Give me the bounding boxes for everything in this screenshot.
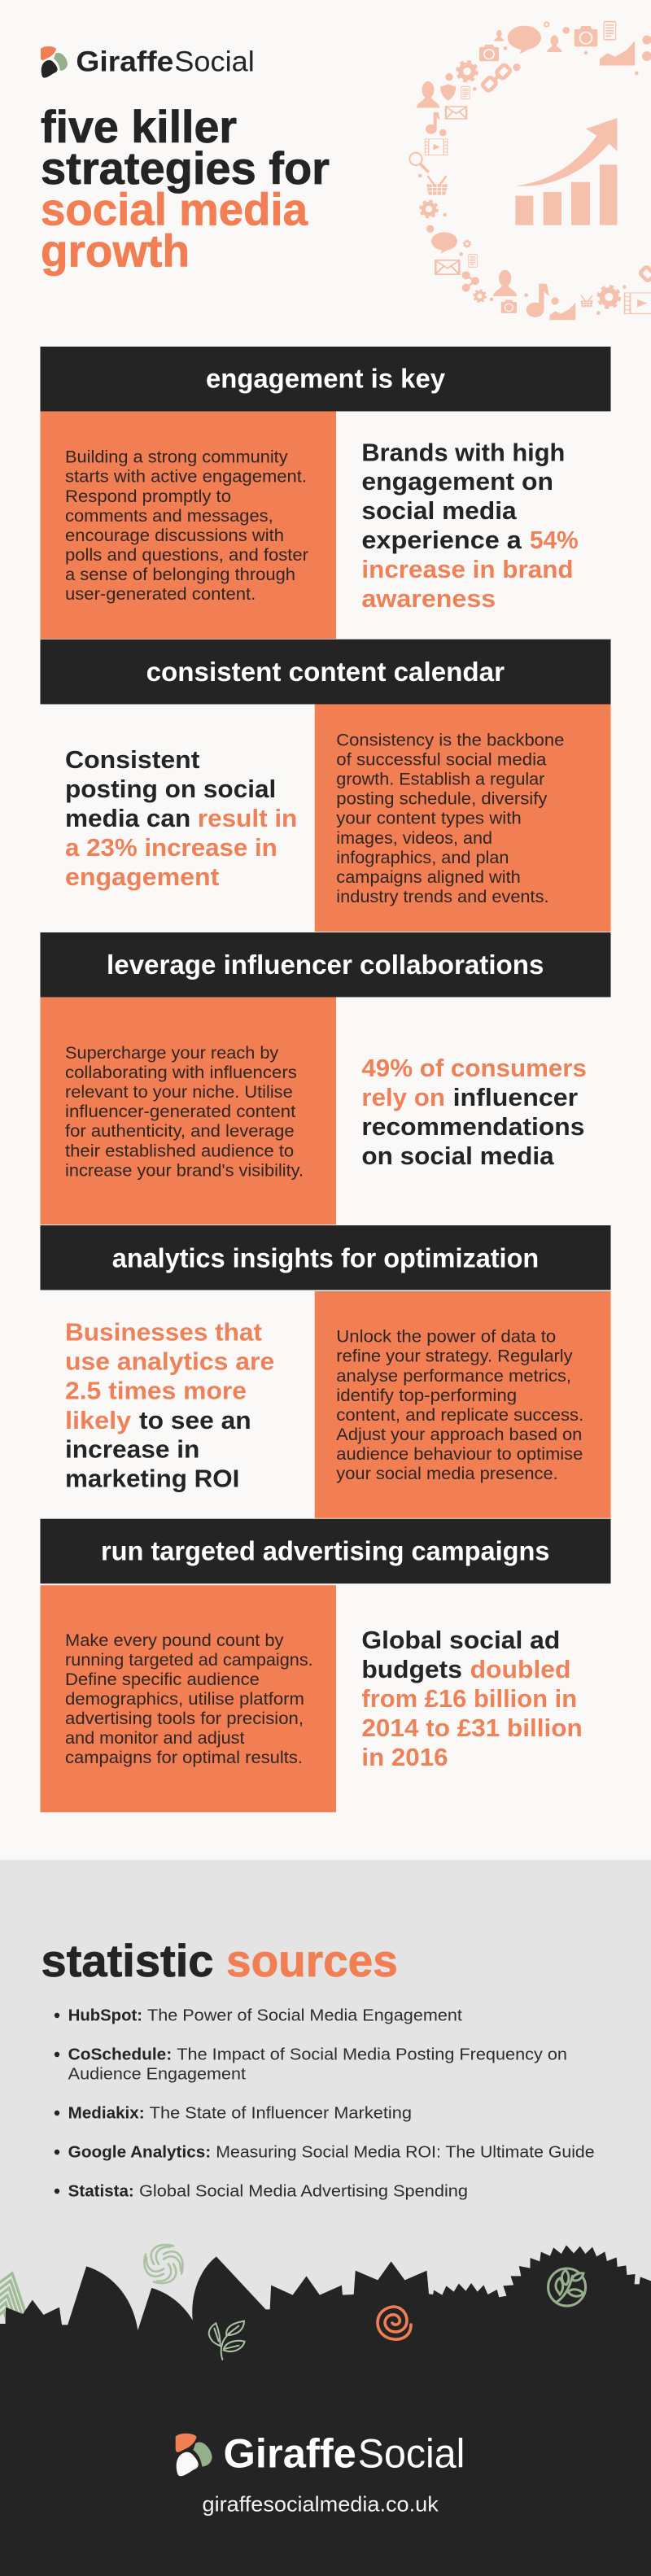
- text block: influencer-generated content: [65, 1102, 295, 1121]
- statistic callout: recommendations: [361, 1112, 584, 1141]
- title: social media: [41, 184, 308, 235]
- statistic callout: budgets: [361, 1655, 462, 1683]
- source list: The Power of Social Media Engagement: [147, 2006, 462, 2024]
- panel: run targeted advertising campaigns: [41, 1519, 610, 1812]
- statistic callout: [361, 1054, 587, 1170]
- logo wordmark: Giraffe: [76, 46, 173, 78]
- text block: your social media presence.: [336, 1465, 558, 1483]
- panel: engagement is key: [41, 347, 610, 639]
- statistic callout: engagement on: [361, 467, 553, 496]
- heading: engagement is key: [206, 364, 446, 394]
- bar chart: [515, 164, 617, 225]
- statistic callout: to see an: [139, 1406, 251, 1434]
- text block: Define specific audience: [65, 1670, 260, 1689]
- text block: content, and replicate success.: [336, 1406, 583, 1425]
- text block: demographics, utilise platform: [65, 1690, 304, 1709]
- title: strategies for: [41, 142, 330, 194]
- panel: statistic sources: [0, 1860, 651, 2381]
- text block: Adjust your approach based on: [336, 1426, 582, 1444]
- text block: Consistency is the backbone: [336, 731, 564, 750]
- statistic callout: 2014 to £31 billion: [361, 1714, 583, 1742]
- text block: images, videos, and: [336, 829, 492, 848]
- text block: encourage discussions with: [65, 526, 284, 545]
- text block: [315, 705, 610, 932]
- statistic callout: in 2016: [361, 1743, 448, 1771]
- heading: [41, 1935, 398, 1986]
- text block: Building a strong community: [65, 448, 288, 467]
- statistic callout: [65, 1317, 274, 1493]
- text block: audience behaviour to optimise: [336, 1445, 583, 1464]
- statistic callout: [65, 745, 297, 891]
- statistic callout: on social media: [361, 1142, 554, 1170]
- icon: green swirl: [144, 2245, 183, 2283]
- statistic callout: [361, 1626, 583, 1771]
- text block: polls and questions, and foster: [65, 546, 308, 565]
- source list: The Impact of Social Media Posting Frequency on: [177, 2046, 567, 2064]
- statistic callout: likely: [65, 1406, 132, 1434]
- statistic callout: 54%: [530, 526, 579, 554]
- icon: rising arrow: [516, 118, 617, 186]
- statistic callout: posting on social: [65, 775, 276, 803]
- statistic callout: awareness: [361, 584, 496, 613]
- statistic callout: a 23% increase in: [65, 833, 277, 862]
- illustration: growth chart inside a ring of social icons: [409, 22, 651, 320]
- text block: industry trends and events.: [336, 888, 548, 906]
- title: [41, 101, 330, 277]
- icon: green chevron tree: [0, 2273, 27, 2324]
- text block: comments and messages,: [65, 507, 273, 526]
- source list: HubSpot:: [68, 2006, 142, 2024]
- heading: statistic: [41, 1935, 213, 1986]
- text block: campaigns for optimal results.: [65, 1749, 303, 1767]
- statistic callout: marketing ROI: [65, 1465, 239, 1493]
- icon: footer logo mark: [176, 2434, 212, 2476]
- text block: [41, 1585, 336, 1812]
- statistic callout: social media: [361, 496, 517, 525]
- panel: leverage influencer collaborations: [41, 932, 610, 1225]
- heading: leverage influencer collaborations: [107, 950, 544, 980]
- title: five killer: [41, 101, 237, 152]
- website url: giraffesocialmedia.co.uk: [202, 2492, 439, 2517]
- icon: round leaf badge: [548, 2268, 586, 2306]
- source list: Statista:: [68, 2182, 134, 2201]
- source list: Audience Engagement: [68, 2065, 246, 2084]
- source list: [55, 2006, 595, 2201]
- heading: [41, 640, 610, 705]
- heading: [41, 1225, 610, 1290]
- heading: analytics insights for optimization: [112, 1243, 539, 1273]
- text block: Supercharge your reach by: [65, 1044, 279, 1063]
- text block: starts with active engagement.: [65, 468, 307, 487]
- statistic callout: engagement: [65, 862, 219, 891]
- heading: [41, 1519, 610, 1583]
- statistic callout: Consistent: [65, 745, 199, 774]
- statistic callout: increase in brand: [361, 555, 574, 583]
- text block: a sense of belonging through: [65, 565, 295, 584]
- text block: advertising tools for precision,: [65, 1709, 304, 1728]
- heading: [41, 347, 610, 412]
- icon: logo mark: [41, 46, 68, 78]
- statistic callout: result in: [198, 804, 297, 832]
- text block: Make every pound count by: [65, 1631, 284, 1650]
- text block: [41, 412, 336, 639]
- text block: refine your strategy. Regularly: [336, 1347, 573, 1366]
- text block: growth. Establish a regular: [336, 771, 544, 789]
- text block: for authenticity, and leverage: [65, 1122, 295, 1141]
- text block: your content types with: [336, 810, 522, 828]
- panel: analytics insights for optimization: [41, 1225, 610, 1518]
- heading: sources: [226, 1935, 398, 1986]
- logo wordmark: [76, 46, 255, 78]
- source list: Global Social Media Advertising Spending: [139, 2182, 468, 2201]
- footer: dark torn-edge panel: [0, 2245, 651, 2576]
- statistic callout: increase in: [65, 1435, 199, 1464]
- text block: campaigns aligned with: [336, 868, 521, 887]
- statistic callout: Businesses that: [65, 1317, 262, 1346]
- text block: collaborating with influencers: [65, 1063, 297, 1082]
- heading: run targeted advertising campaigns: [101, 1535, 550, 1565]
- source list: The State of Influencer Marketing: [150, 2103, 412, 2122]
- footer wordmark: Giraffe: [223, 2430, 356, 2476]
- statistic callout: Brands with high: [361, 438, 565, 466]
- text block: their established audience to: [65, 1142, 294, 1160]
- text block: identify top-performing: [336, 1386, 517, 1405]
- icon: leaf sprig: [209, 2321, 245, 2360]
- footer wordmark: Social: [358, 2430, 465, 2476]
- text block: Respond promptly to: [65, 487, 231, 506]
- text block: relevant to your niche. Utilise: [65, 1083, 293, 1102]
- source list: Google Analytics:: [68, 2143, 211, 2162]
- heading: consistent content calendar: [146, 657, 505, 687]
- statistic callout: Global social ad: [361, 1626, 560, 1654]
- footer wordmark: [223, 2430, 465, 2476]
- statistic callout: experience a: [361, 526, 522, 554]
- logo: footer brand: [176, 2430, 465, 2517]
- logo: GiraffeSocial header: [41, 46, 255, 78]
- statistic callout: from £16 billion in: [361, 1684, 577, 1713]
- statistic callout: doubled: [470, 1655, 571, 1683]
- text block: analyse performance metrics,: [336, 1367, 571, 1386]
- statistic callout: media can: [65, 804, 190, 832]
- statistic callout: use analytics are: [65, 1347, 274, 1376]
- icon: orange spiral: [378, 2307, 411, 2339]
- text block: [315, 1291, 610, 1518]
- text block: [41, 998, 336, 1225]
- text block: user-generated content.: [65, 585, 256, 604]
- logo wordmark: Social: [174, 46, 255, 78]
- panel: consistent content calendar: [41, 640, 610, 932]
- text block: infographics, and plan: [336, 849, 509, 867]
- source list: Measuring Social Media ROI: The Ultimate Guide: [216, 2143, 595, 2162]
- text block: Unlock the power of data to: [336, 1328, 556, 1347]
- statistic callout: influencer: [453, 1083, 578, 1111]
- text block: and monitor and adjust: [65, 1729, 245, 1748]
- statistic callout: [361, 438, 579, 613]
- text block: posting schedule, diversify: [336, 790, 548, 809]
- title: growth: [41, 225, 190, 277]
- text block: increase your brand's visibility.: [65, 1161, 304, 1180]
- icon ring: [409, 22, 651, 320]
- text block: running targeted ad campaigns.: [65, 1651, 313, 1670]
- statistic callout: 49% of consumers: [361, 1054, 587, 1082]
- source list: Mediakix:: [68, 2103, 145, 2122]
- statistic callout: 2.5 times more: [65, 1377, 247, 1404]
- text block: of successful social media: [336, 750, 547, 770]
- heading: [41, 932, 610, 998]
- source list: CoSchedule:: [68, 2046, 172, 2064]
- statistic callout: rely on: [361, 1083, 445, 1111]
